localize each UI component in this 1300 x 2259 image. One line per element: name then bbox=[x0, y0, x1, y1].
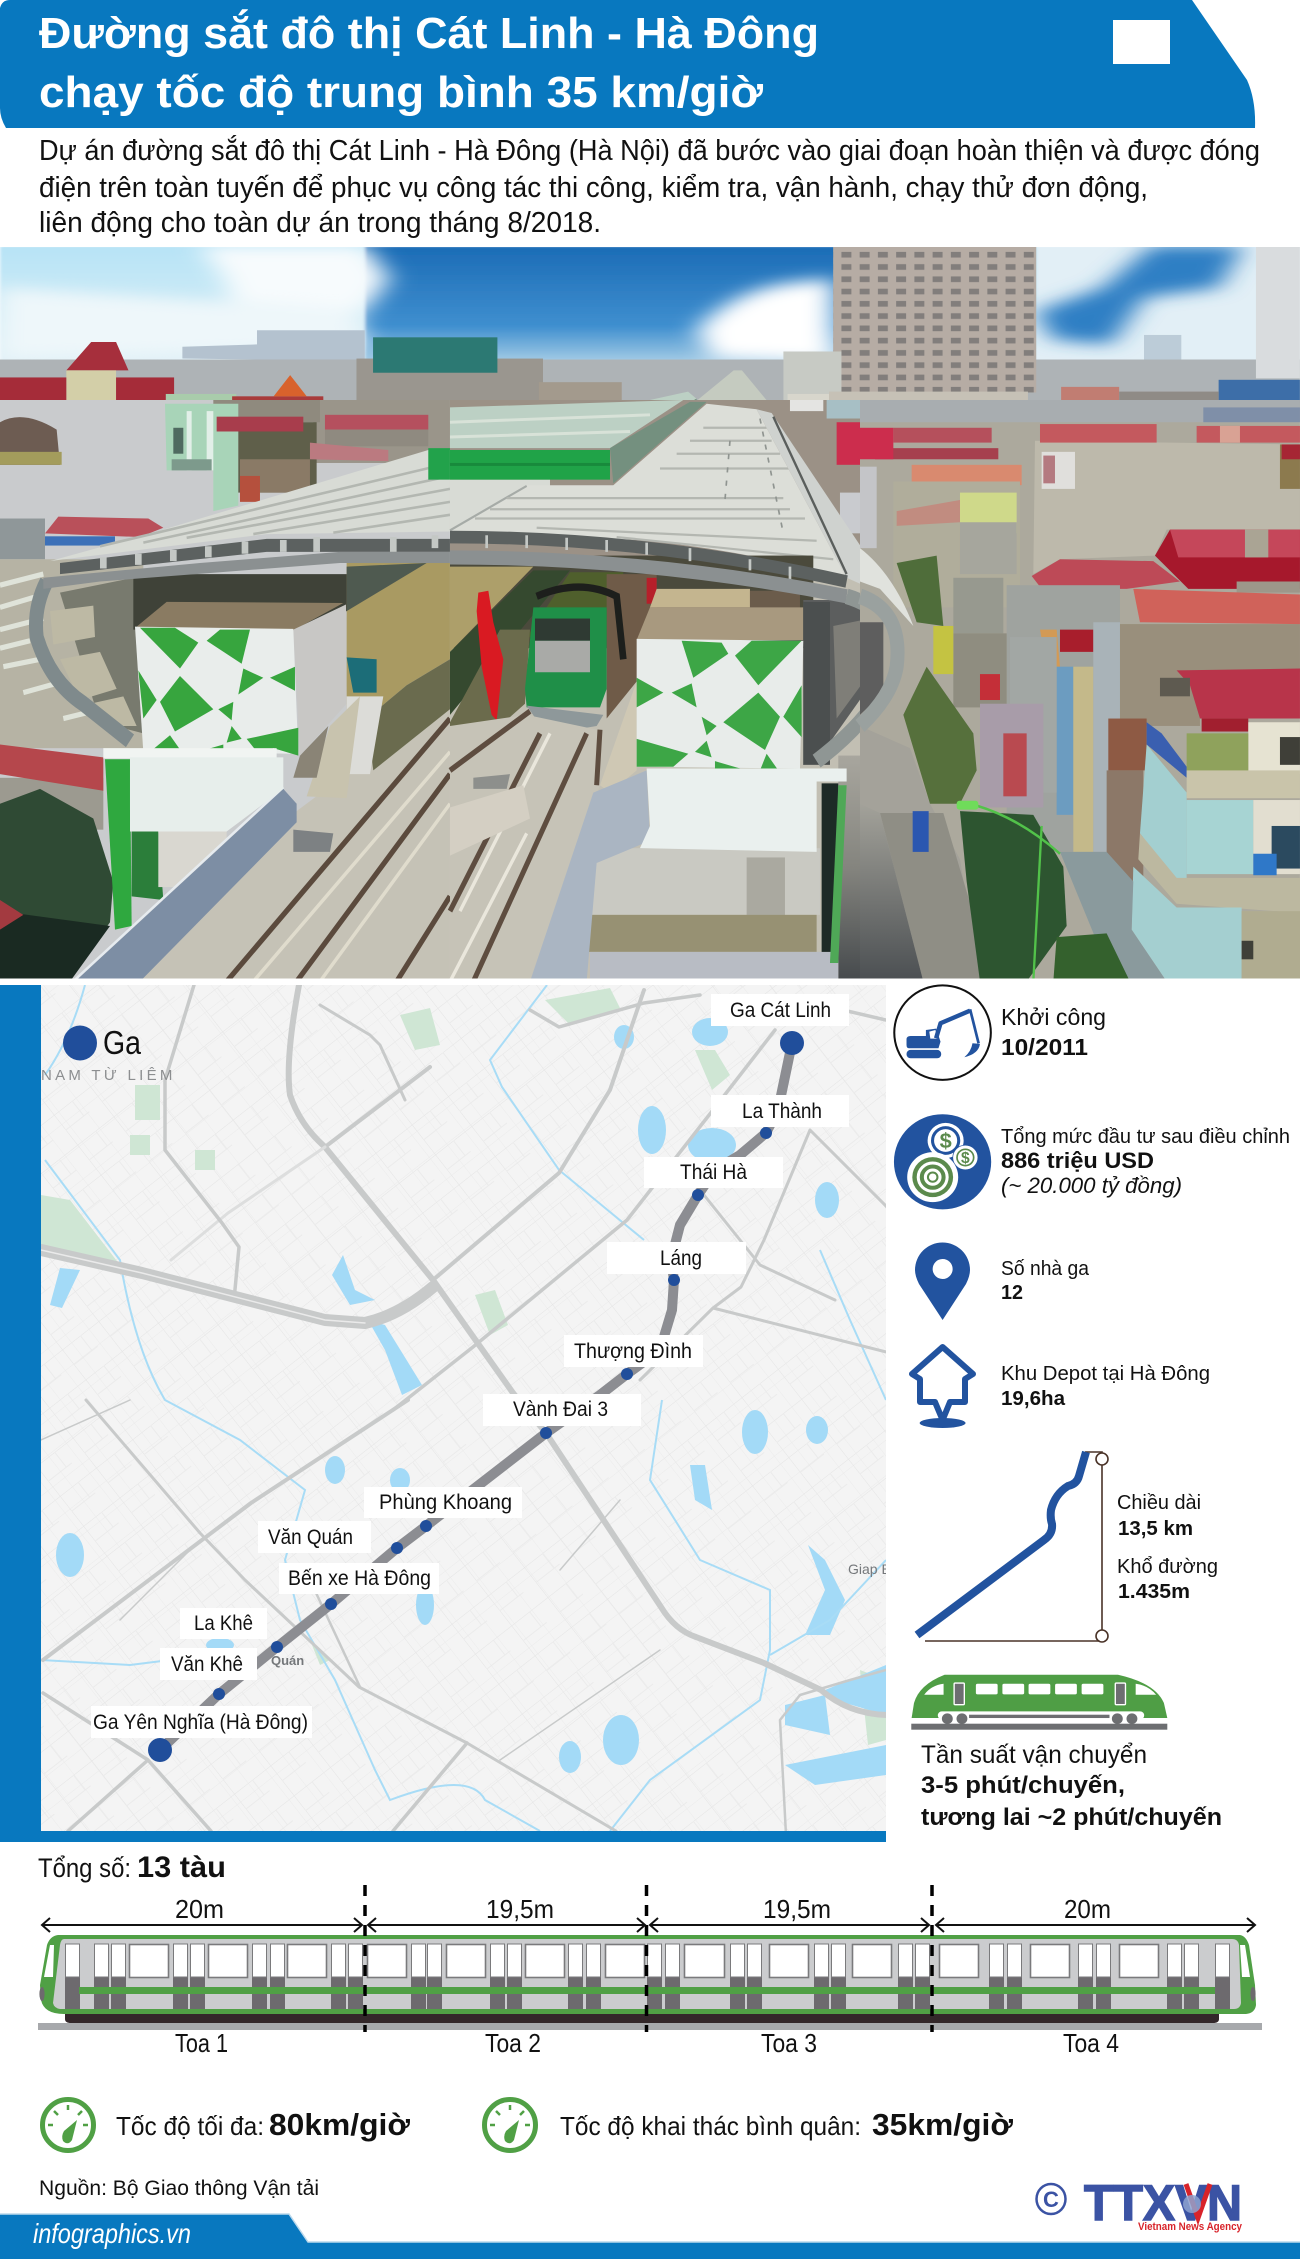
train diagram bbox=[38, 1885, 1262, 2058]
lantern bbox=[450, 400, 683, 448]
street trees bbox=[903, 667, 977, 804]
canopy beam and arc bbox=[450, 537, 847, 581]
intro text: liên động cho toàn dự án trong tháng 8/2018. bbox=[39, 207, 601, 239]
lower roofs bbox=[1032, 559, 1180, 589]
map place labels: Quán bbox=[271, 1653, 304, 1668]
car labels: Toa 2 bbox=[485, 2028, 541, 2058]
station labels: Láng bbox=[660, 1247, 702, 1270]
fact: total investment: Tổng mức đầu tư sau điều chỉnh bbox=[1001, 1126, 1290, 1148]
length arrows bbox=[42, 1918, 1255, 1932]
green midline bbox=[79, 1987, 1215, 1994]
intro text bbox=[39, 134, 1260, 239]
interior gold wall bbox=[347, 563, 450, 719]
blue frame bbox=[0, 985, 886, 1842]
fact: start of construction bbox=[894, 985, 1106, 1080]
length labels: 19,5m bbox=[763, 1894, 831, 1924]
station dots bbox=[148, 1031, 804, 1762]
roof tip and lantern top bbox=[698, 370, 766, 400]
fact: number of stations bbox=[915, 1242, 1090, 1320]
fact: depot: 19,6ha bbox=[1001, 1388, 1066, 1410]
door lower panels bbox=[65, 1977, 1230, 2009]
station labels: La Thành bbox=[742, 1100, 822, 1123]
teal building bbox=[1140, 744, 1187, 882]
windshields bbox=[44, 1945, 54, 1977]
icon: coins and gear: $ bbox=[961, 1150, 970, 1167]
rail bbox=[38, 2023, 1262, 2030]
title: chạy tốc độ trung bình 35 km/giờ bbox=[39, 68, 764, 117]
fact: total investment bbox=[894, 1114, 1290, 1209]
station labels: La Khê bbox=[194, 1612, 253, 1635]
fact: frequency bbox=[911, 1675, 1222, 1831]
length labels: 20m bbox=[1064, 1894, 1111, 1924]
lower red roof and wall bbox=[0, 778, 103, 830]
TTXVN logo: Vietnam News Agency bbox=[1138, 2221, 1243, 2233]
red flag bbox=[477, 591, 503, 720]
fact: route length and gauge: Khổ đường bbox=[1117, 1556, 1218, 1578]
tower front bbox=[637, 639, 803, 769]
roof left wing bbox=[50, 450, 450, 561]
windows bbox=[130, 1944, 1158, 1978]
station labels: Ga Cát Linh bbox=[730, 999, 831, 1022]
title: Đường sắt đô thị Cát Linh - Hà Đông bbox=[39, 8, 819, 58]
fact: frequency: Tần suất vận chuyển bbox=[921, 1741, 1147, 1769]
main roof bbox=[550, 404, 845, 575]
intro text: điện trên toàn tuyến để phục vụ công tác thi công, kiểm tra, vận hành, chạy thử đơn động, bbox=[39, 172, 1148, 204]
icon: route diagram bbox=[917, 1452, 1108, 1642]
speed: maximum: Tốc độ tối đa: bbox=[116, 2111, 264, 2141]
speed: average: 35km/giờ bbox=[872, 2107, 1014, 2142]
photo: Cát Linh station viaduct bbox=[0, 245, 1300, 982]
fact: start of construction: Khởi công bbox=[1001, 1004, 1106, 1030]
stairs bbox=[307, 696, 360, 798]
tree bbox=[0, 788, 113, 926]
station labels bbox=[91, 994, 849, 1738]
header banner bbox=[0, 0, 1255, 128]
canopy tip and arc bbox=[860, 548, 913, 626]
legend: station: Ga bbox=[103, 1024, 142, 1061]
fact: route length and gauge: 13,5 km bbox=[1118, 1518, 1193, 1540]
fact: frequency: tương lai ~2 phút/chuyến bbox=[921, 1804, 1222, 1831]
station labels: Phùng Khoang bbox=[379, 1491, 512, 1514]
length labels bbox=[175, 1894, 1111, 1924]
metro train bbox=[537, 587, 623, 659]
fact: depot: Khu Depot tại Hà Đông bbox=[1001, 1363, 1210, 1385]
title bbox=[39, 8, 819, 117]
undercarriage bbox=[65, 2014, 1219, 2023]
right column and arch inside bbox=[803, 600, 860, 765]
street bbox=[860, 726, 980, 982]
car labels bbox=[175, 2028, 1119, 2058]
length labels: 19,5m bbox=[486, 1894, 554, 1924]
tower top bbox=[650, 589, 750, 607]
speed: maximum bbox=[42, 2100, 411, 2150]
upper photo: sky and far city bbox=[0, 247, 1300, 400]
icon: gauge bbox=[42, 2100, 94, 2150]
icon: gauge bbox=[484, 2100, 536, 2150]
ventilation tower bbox=[133, 574, 347, 630]
left red kiosk bbox=[45, 517, 163, 537]
total trains heading: Tổng số: bbox=[38, 1853, 131, 1883]
icon: green train bbox=[911, 1675, 1167, 1730]
red roof, brick, lower block bbox=[1177, 669, 1300, 719]
total trains heading: 13 tàu bbox=[137, 1851, 226, 1884]
station labels: Văn Khê bbox=[171, 1653, 243, 1676]
track bed bbox=[450, 716, 587, 767]
interior bbox=[450, 556, 813, 648]
door upper panels bbox=[66, 1944, 1230, 1977]
fact: total investment: 886 triệu USD bbox=[1001, 1148, 1154, 1173]
footer band: infographics.vn bbox=[33, 2218, 191, 2249]
fact: frequency: 3-5 phút/chuyến, bbox=[921, 1772, 1125, 1799]
station labels: Ga Yên Nghĩa (Hà Đông) bbox=[93, 1711, 308, 1734]
red warehouse bbox=[1155, 530, 1300, 589]
mid facades bbox=[1057, 667, 1073, 815]
wall beneath the canopy bbox=[0, 559, 143, 748]
icon: depot house bbox=[912, 1347, 973, 1428]
lower photo: center section bbox=[450, 400, 900, 982]
station labels: Thái Hà bbox=[680, 1161, 747, 1184]
map place labels: NAM TỪ LIÊM bbox=[41, 1067, 176, 1084]
lower wall bbox=[590, 848, 820, 915]
speed: average: Tốc độ khai thác bình quân: bbox=[560, 2111, 861, 2141]
lower photo: left section bbox=[0, 400, 450, 982]
source: Nguồn: Bộ Giao thông Vận tải bbox=[39, 2177, 319, 2200]
fact: number of stations: Số nhà ga bbox=[1001, 1258, 1090, 1280]
map place labels bbox=[41, 1067, 903, 1668]
fact: route length and gauge: 1.435m bbox=[1118, 1581, 1190, 1603]
fact: route length and gauge bbox=[917, 1452, 1218, 1642]
car separators bbox=[365, 1885, 932, 2032]
station labels: Vành Đai 3 bbox=[513, 1398, 608, 1421]
icon: excavator bbox=[894, 985, 991, 1080]
fact: route length and gauge: Chiều dài bbox=[1117, 1492, 1201, 1514]
fact: total investment: (~ 20.000 tỷ đồng) bbox=[1001, 1173, 1182, 1198]
road on right bbox=[838, 756, 860, 978]
TTXVN logo: TTXVN bbox=[1084, 2175, 1242, 2231]
total trains heading bbox=[38, 1851, 226, 1884]
TTXVN logo: C bbox=[1043, 2187, 1059, 2212]
speed: maximum: 80km/giờ bbox=[269, 2107, 411, 2142]
footer band bbox=[0, 2214, 1300, 2259]
map base and roads bbox=[41, 985, 903, 1835]
train body bbox=[40, 1935, 1256, 2014]
speed: average bbox=[484, 2100, 1014, 2150]
big wall bbox=[1033, 441, 1300, 574]
background buildings bbox=[826, 400, 860, 418]
white panel bbox=[103, 748, 277, 759]
fact: number of stations: 12 bbox=[1001, 1282, 1023, 1304]
lower photo: right section bbox=[860, 400, 1300, 982]
narrow facade strip bbox=[1060, 852, 1167, 982]
station labels: Văn Quán bbox=[268, 1526, 353, 1549]
legend: station bbox=[63, 1024, 142, 1061]
left rooftops bbox=[893, 428, 992, 443]
length labels: 20m bbox=[175, 1894, 224, 1924]
icon: map pin bbox=[915, 1242, 970, 1320]
car labels: Toa 1 bbox=[175, 2028, 228, 2058]
route line bbox=[160, 1043, 792, 1750]
icon: coins and gear: $ bbox=[940, 1129, 952, 1153]
car labels: Toa 3 bbox=[761, 2028, 817, 2058]
car labels: Toa 4 bbox=[1063, 2028, 1119, 2058]
station labels: Bến xe Hà Đông bbox=[288, 1567, 431, 1590]
green column bbox=[132, 832, 163, 900]
station labels: Thượng Đình bbox=[574, 1340, 692, 1363]
map place labels: Giap Bát bbox=[848, 1561, 903, 1577]
map panel bbox=[0, 985, 903, 1842]
fact: depot bbox=[912, 1347, 1210, 1428]
icon: coins and gear bbox=[894, 1114, 991, 1209]
fence and platform bbox=[140, 696, 450, 982]
fact: start of construction: 10/2011 bbox=[1001, 1034, 1088, 1060]
